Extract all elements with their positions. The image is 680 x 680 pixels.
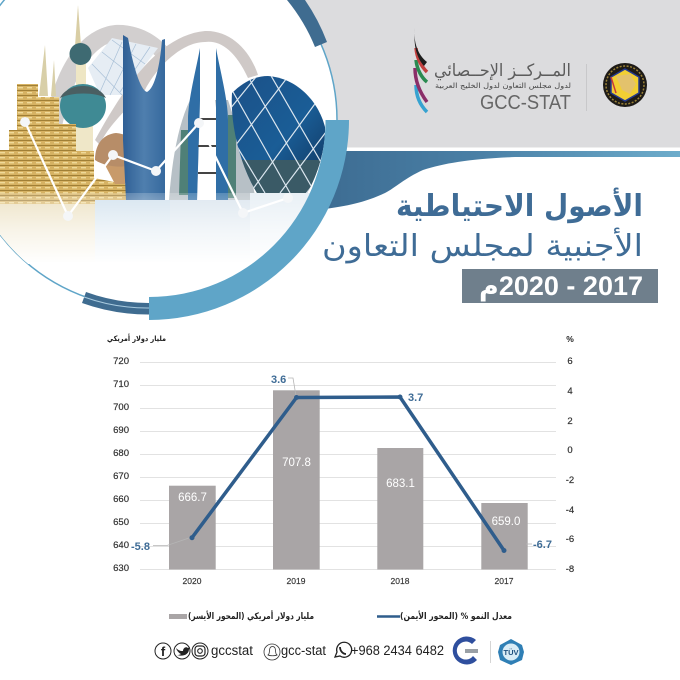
icon: twitter — [174, 643, 190, 659]
right axis title: % — [566, 334, 574, 344]
light blue thick arc — [149, 120, 349, 320]
footer social contacts — [155, 642, 444, 660]
x axis labels — [183, 576, 514, 586]
growth labels: -6.7 — [533, 539, 552, 551]
right axis labels: 4 — [567, 386, 573, 397]
bar values: 666.7 — [178, 492, 207, 504]
x axis labels: 2020 — [183, 576, 202, 586]
dark bottom arc — [82, 292, 149, 315]
handle: gcc-stat: gcc-stat — [281, 643, 326, 658]
bar values: 683.1 — [386, 478, 415, 490]
lattice dome behind towers — [88, 38, 158, 95]
bars — [169, 390, 528, 570]
illustration: Gulf landmarks and coins — [0, 5, 340, 264]
right axis labels: 0 — [567, 445, 573, 456]
left axis labels — [113, 356, 129, 574]
base — [106, 165, 126, 184]
growth labels: 3.7 — [408, 392, 423, 404]
ground reflection — [0, 193, 340, 264]
trend polyline — [25, 122, 288, 216]
Aldar dome — [232, 76, 326, 193]
lattice panel — [88, 38, 158, 95]
left axis labels: 670 — [113, 471, 129, 482]
ribbon pale — [417, 80, 427, 97]
handle: gccstat: gccstat — [211, 643, 253, 658]
icon: whatsapp — [335, 642, 352, 657]
left axis labels: 650 — [113, 517, 129, 528]
right axis labels: -6 — [566, 534, 574, 545]
main sphere — [60, 84, 106, 128]
TUV badge — [498, 639, 524, 665]
thin line in bottom arc — [84, 297, 149, 308]
x axis labels: 2019 — [287, 576, 306, 586]
Bahrain WTC — [169, 48, 256, 202]
white trend line — [20, 117, 293, 221]
left axis labels: 640 — [113, 540, 129, 551]
bar values: 707.8 — [282, 457, 311, 469]
legend: bars — [169, 610, 314, 622]
growth labels: 3.6 — [271, 374, 286, 386]
growth labels: -5.8 — [131, 541, 150, 553]
emblem ring — [603, 63, 647, 107]
ribbon purple — [415, 68, 427, 102]
emblem hexagon — [611, 69, 639, 101]
lattice lines — [92, 40, 150, 95]
reflection colours — [0, 204, 95, 262]
dome fill — [232, 76, 326, 193]
left axis labels: 700 — [113, 402, 129, 413]
x axis labels: 2017 — [495, 576, 514, 586]
coin stacks — [0, 84, 126, 204]
reflection fade — [0, 193, 306, 264]
main spire — [75, 5, 81, 46]
phone number: +968 2434 6482 — [351, 643, 444, 658]
logo separator — [586, 64, 587, 111]
right axis labels: 6 — [567, 356, 573, 367]
header band — [280, 0, 680, 148]
Kuwait towers — [39, 5, 106, 156]
x axis labels: 2018 — [391, 576, 410, 586]
incense burner dome building — [95, 133, 126, 184]
left axis title: مليار دولار أمريكي — [107, 333, 166, 343]
Kingdom tower — [123, 35, 165, 200]
logo latin name: GCC-STAT — [480, 92, 571, 114]
TUV centre — [502, 644, 520, 660]
icon: facebook: f — [161, 644, 166, 659]
skyline — [242, 160, 321, 193]
diamond lattice — [232, 76, 325, 193]
legend bar label: مليار دولار أمريكي (المحور الأيسر) — [188, 610, 314, 622]
left axis labels: 660 — [113, 494, 129, 505]
ribbon red — [416, 48, 427, 72]
legend line label: معدل النمو % (المحور الأيمن) — [400, 610, 512, 622]
header swoosh — [320, 151, 680, 209]
right axis labels: 2 — [567, 416, 573, 427]
stem — [76, 64, 86, 85]
arch behind towers — [51, 24, 166, 124]
right sail — [216, 48, 228, 202]
right axis labels: -8 — [566, 564, 574, 575]
dark top arc — [287, 0, 327, 47]
bar values — [178, 457, 520, 528]
growth line — [192, 397, 504, 550]
left axis labels: 680 — [113, 448, 129, 459]
G ring — [453, 636, 477, 664]
combo chart — [107, 333, 574, 586]
left axis labels: 630 — [113, 563, 129, 574]
logo arabic subtitle: لدول مجلس التعاون لدول الخليج العربية — [435, 82, 571, 90]
icon: snapchat — [264, 644, 280, 660]
bar values: 659.0 — [492, 516, 520, 528]
logo arabic name: المــركــز الإحــصائي — [434, 61, 571, 81]
icon: facebook — [155, 643, 171, 659]
growth markers — [190, 394, 506, 553]
title line 1: الأصول الاحتياطية — [396, 187, 643, 224]
TUV text: TÜV — [504, 648, 518, 657]
legend: line — [377, 610, 512, 622]
trend markers — [20, 117, 293, 221]
icon: instagram — [192, 643, 208, 659]
minor tower spires — [39, 45, 56, 96]
leader lines — [153, 378, 532, 546]
ribbon green — [416, 60, 427, 82]
upper sphere — [70, 43, 92, 65]
dome — [95, 133, 124, 166]
lower stem — [76, 126, 93, 151]
ribbon — [414, 28, 427, 112]
GCC emblem — [603, 63, 647, 107]
bridges — [198, 118, 216, 174]
date background — [462, 269, 658, 303]
legend line swatch — [377, 615, 400, 618]
sail bodies — [169, 100, 256, 200]
window strip — [179, 115, 236, 198]
circular photo area — [0, 0, 337, 308]
right axis labels: -4 — [566, 505, 574, 516]
ribbon black — [414, 28, 427, 66]
certification separator — [490, 641, 491, 663]
second arch — [95, 31, 258, 145]
TUV disc — [498, 639, 524, 665]
GCC-STAT logo — [414, 28, 571, 114]
right axis labels: -2 — [566, 475, 574, 486]
emblem map — [616, 74, 636, 94]
date text: 2017 - 2020م — [479, 271, 643, 302]
G bar — [465, 649, 478, 653]
left axis labels: 690 — [113, 425, 129, 436]
growth labels — [131, 374, 552, 553]
gridlines — [140, 362, 556, 570]
left axis labels: 720 — [113, 356, 129, 367]
left axis labels: 710 — [113, 379, 129, 390]
date box — [462, 269, 658, 303]
right axis labels — [566, 356, 574, 575]
certification G logo — [453, 636, 478, 664]
left sail — [188, 48, 200, 202]
ribbon blue — [416, 85, 427, 112]
legend bar swatch — [169, 614, 187, 619]
title line 2: الأجنبية لمجلس التعاون — [322, 226, 643, 264]
